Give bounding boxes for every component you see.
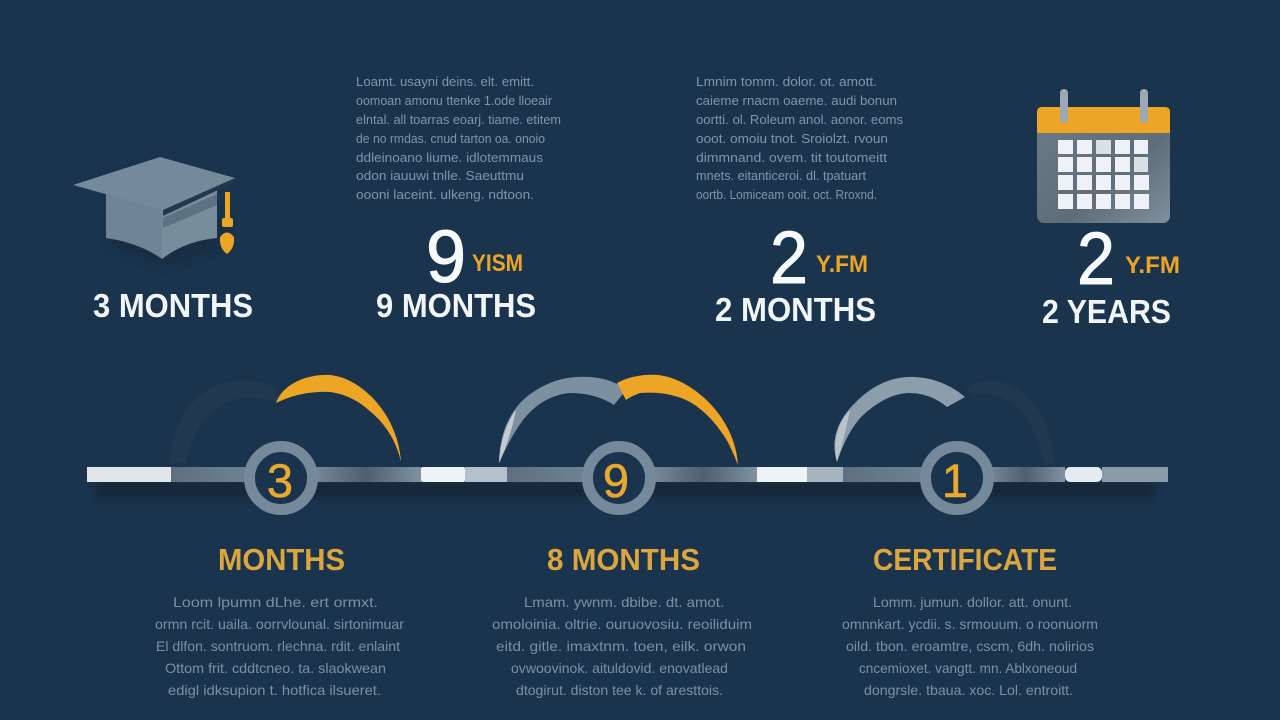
node: 9: 9	[603, 454, 629, 507]
heading: 8 months gold: 8 MONTHS	[547, 542, 700, 577]
node: 1	[926, 446, 988, 510]
text block: lower right paragraph: Lomm. jumun. dollor. att. onunt.	[873, 594, 1072, 610]
text block: lower left paragraph: Loom lpumn dLhe. ert ormxt.	[173, 594, 378, 610]
text block: lower centre paragraph: eitd. gitle. imaxtnm. toen, eilk. orwon	[496, 638, 746, 654]
text block: lower centre paragraph: dtogirut. diston tee k. of aresttois.	[516, 682, 723, 698]
figure: 2 with small gold label	[770, 216, 868, 299]
text block: upper left paragraph: elntal. all toarras eoarj. tiame. etitem	[356, 113, 561, 127]
text block: lower left paragraph: edigl idksupion t. hotfica ilsueret.	[168, 682, 381, 698]
text block: upper left paragraph: oooni laceint. ulkeng. ndtoon.	[356, 188, 534, 202]
text block: upper centre paragraph	[696, 75, 903, 202]
arc: dark right of third node	[965, 381, 1054, 463]
text block: lower centre paragraph	[492, 594, 752, 698]
figure: 9 with small gold label: YISM	[472, 250, 523, 277]
text block: upper centre paragraph: caieme rnacm oaeme. audi bonun	[696, 94, 897, 108]
node: 3	[250, 446, 312, 510]
text block: upper centre paragraph: oortb. Lomiceam ooit. oct. Rroxnd.	[696, 188, 877, 202]
text block: lower centre paragraph: omoloinia. oltrie. ouruovosiu. reoiliduim	[492, 616, 752, 632]
heading: months gold: MONTHS	[218, 542, 345, 577]
heading: 2 months: 2 MONTHS	[715, 291, 876, 328]
heading: 2 years: 2 YEARS	[1042, 293, 1171, 330]
figure: 2 with small gold label, years: Y.FM	[1125, 252, 1180, 279]
text block: upper left paragraph: ddleinoano liume. idlotemmaus	[356, 151, 543, 165]
text block: upper centre paragraph: dimmnand. ovem. tit toutomeitt	[696, 151, 888, 165]
text block: upper left paragraph: oomoan amonu ttenke 1.ode lloeair	[356, 94, 552, 108]
arc: gold right of second node	[617, 375, 738, 465]
text block: upper centre paragraph: mnets. eitanticeroi. dl. tpatuart	[696, 169, 867, 183]
figure: 2 with small gold label: 2	[770, 216, 808, 299]
figure: 2 with small gold label: Y.FM	[816, 251, 868, 278]
arc: grey left of second node	[499, 377, 626, 463]
text block: lower centre paragraph: ovwoovinok. aituldovid. enovatlead	[511, 660, 728, 676]
arc: gold right of first node	[276, 375, 401, 462]
node: 9	[588, 446, 650, 510]
text block: lower right paragraph: oild. tbon. eroamtre, cscm, 6dh. nolirios	[846, 638, 1094, 654]
heading: certificate gold: CERTIFICATE	[873, 542, 1057, 577]
node: 3: 3	[267, 454, 293, 507]
text block: upper centre paragraph: oortti. ol. Roleum anol. aonor. eoms	[696, 113, 903, 127]
text block: lower right paragraph: omnnkart. ycdii. s. srmouum. o roonuorm	[842, 616, 1098, 632]
arc: grey left of third node	[834, 377, 965, 462]
figure: 2 with small gold label, years: 2	[1077, 217, 1115, 300]
text block: upper left paragraph: odon iauuwi tnlle. Saeuttmu	[356, 169, 524, 183]
timeline bar	[87, 467, 1168, 497]
figure: 9 with small gold label: 9	[426, 215, 466, 298]
text block: lower left paragraph	[155, 594, 404, 698]
icon: calendar	[1037, 89, 1170, 223]
text block: upper left paragraph: Loamt. usayni deins. elt. emitt.	[356, 75, 534, 89]
text block: lower right paragraph	[842, 594, 1098, 698]
icon: graduation cap	[73, 157, 235, 266]
text block: lower left paragraph: ormn rcit. uaila. oorrvlounal. sirtonimuar	[155, 616, 404, 632]
arc: dark left of first node	[169, 381, 277, 463]
heading: 3 months: 3 MONTHS	[93, 287, 253, 324]
node: 1: 1	[942, 454, 968, 507]
text block: upper centre paragraph: Lmnim tomm. dolor. ot. amott.	[696, 75, 877, 89]
figure: 9 with small gold label	[426, 215, 523, 298]
text block: lower right paragraph: dongrsle. tbaua. xoc. Lol. entroitt.	[864, 682, 1073, 698]
text block: lower left paragraph: El dlfon. sontruom. rlechna. rdit. enlaint	[156, 638, 400, 654]
figure: 2 with small gold label, years	[1077, 217, 1180, 300]
text block: lower left paragraph: Ottom frit. cddtcneo. ta. slaokwean	[165, 660, 386, 676]
heading: 9 months: 9 MONTHS	[376, 287, 536, 324]
text block: upper left paragraph: de no rmdas. cnud tarton oa. onoio	[356, 132, 545, 146]
text block: lower right paragraph: cncemioxet. vangtt. mn. Ablxoneoud	[859, 660, 1077, 676]
text block: upper left paragraph	[356, 75, 561, 202]
text block: lower centre paragraph: Lmam. ywnm. dbibe. dt. amot.	[524, 594, 724, 610]
text block: upper centre paragraph: ooot. omoiu tnot. Sroiolzt. rvoun	[696, 132, 888, 146]
